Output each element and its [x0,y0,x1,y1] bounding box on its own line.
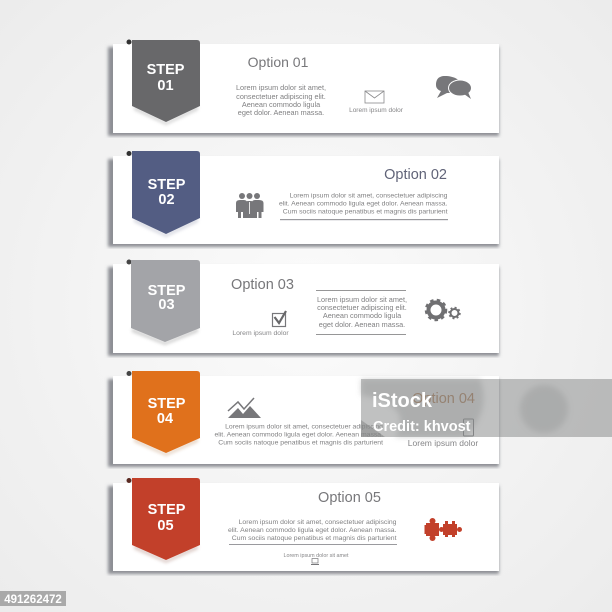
text block: option 01: eget dolor. Aenean massa. [238,108,324,117]
ribbon: step 05: STEP [148,502,186,518]
caption: option 04: Lorem ipsum dolor [408,438,478,448]
caption: checkbox: Lorem ipsum dolor [232,330,289,337]
image id tag: 491262472 [4,594,62,606]
heading: option 04: Option 04 [412,391,475,407]
watermark band [361,379,612,437]
text block: option 05: Lorem ipsum dolor sit amet, consectetuer adipiscing [239,519,397,526]
heading: option 03: Option 03 [231,277,294,293]
text block: option 04: Cum sociis natoque penatibus et magnis dis parturient [218,440,383,446]
icon: speech bubbles [436,76,472,99]
divider line: option 05 [229,544,397,545]
ribbon: step 01: 01 [157,78,174,94]
image id tag [0,591,66,606]
ribbon: step 05: 05 [157,518,174,534]
divider line: option 02 [280,219,448,220]
caption: option 05: Lorem ipsum dolor sit amet [283,553,349,559]
text block: option 02: Cum sociis natoque penatibus et magnis dis parturient [283,208,448,216]
icon: envelope [365,91,384,103]
icon: puzzle [424,518,462,541]
text block: option 01: consectetuer adipiscing elit. [236,92,326,101]
text block: option 05: elit. Aenean commodo ligula eget dolor. Aenean massa. [228,527,397,534]
ribbon: step 02: STEP [148,177,186,193]
text block: option 03: consectetuer adipiscing elit. [317,303,407,312]
icon: mountain chart [228,398,261,418]
text block: option 01: Lorem ipsum dolor sit amet, [236,83,326,92]
watermark heading: iStock [372,390,433,412]
icon: laptop [311,558,319,564]
ribbon: step 03 [131,260,200,342]
text block: option 03: eget dolor. Aenean massa. [319,320,405,329]
text block: option 03: Aenean commodo ligula [323,311,402,320]
heading: option 02: Option 02 [384,167,447,183]
ribbon: step 03: STEP [148,283,186,299]
ribbon: step 01 [132,40,200,122]
ribbon: step 04: 04 [157,411,173,427]
icon: gears [426,300,460,320]
icon: team of people [236,193,264,218]
watermark credit: Credit: khvost [373,419,471,435]
panel: step 03 [108,260,499,356]
text block: option 04: Lorem ipsum dolor sit amet, consectetuer adipiscing [225,424,383,430]
ribbon: step 02 [132,151,200,234]
ribbon: step 04 [132,371,200,453]
text block: option 03 [316,290,407,335]
text block: option 01: Aenean commodo ligula [242,100,321,109]
ribbon: step 05 [132,478,200,560]
text block: option 05: Cum sociis natoque penatibus et magnis dis parturient [232,535,397,542]
heading: option 01: Option 01 [248,54,309,70]
text block: option 02: elit. Aenean commodo ligula eget dolor. Aenean massa. [279,200,448,208]
ribbon: step 03: 03 [158,297,175,313]
text block: option 02: Lorem ipsum dolor sit amet, consectetuer adipiscing [290,192,448,200]
panel: step 02 [108,151,499,247]
panel: step 01 [108,40,499,136]
text block: option 03: Lorem ipsum dolor sit amet, [317,295,407,304]
caption: envelope: Lorem ipsum dolor [349,107,404,114]
text block: option 04: elit. Aenean commodo ligula eget dolor. Aenean massa. [214,432,383,438]
ribbon: step 01: STEP [147,62,185,78]
panel: step 04 [108,371,499,467]
panel: step 05 [108,478,499,574]
icon: checkbox [272,311,286,326]
ribbon: step 02: 02 [158,192,175,208]
heading: option 05: Option 05 [318,490,381,506]
icon: tablet [464,419,474,436]
ribbon: step 04: STEP [148,396,186,412]
